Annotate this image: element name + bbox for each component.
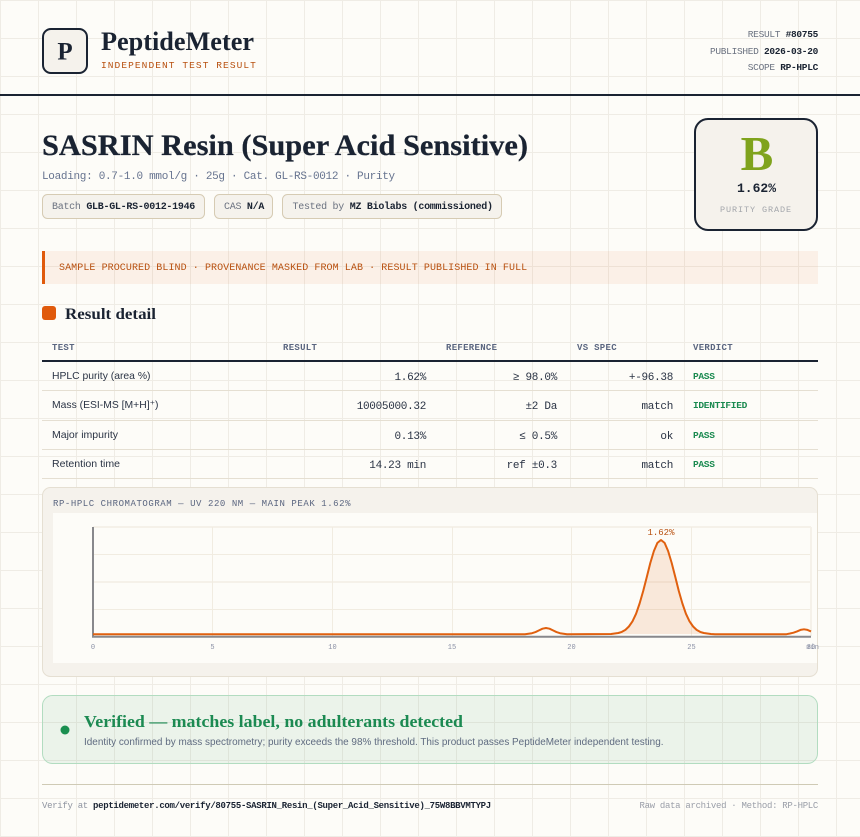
row: retention time: Retention time: [52, 458, 120, 470]
product title: SASRIN Resin (Super Acid Sensitive): [42, 129, 528, 162]
result metadata: PUBLISHED 2026-03-20: [710, 46, 819, 57]
axes: [93, 527, 811, 637]
table header: TEST: [52, 343, 75, 353]
row: major impurity: PASS: [693, 430, 715, 441]
row: hplc purity: PASS: [693, 371, 715, 382]
pill: tested by: [282, 194, 502, 218]
row: mass: Mass (ESI-MS [M+H]⁺): [52, 399, 158, 411]
table header: REFERENCE: [446, 343, 498, 353]
x axis labels: 20: [567, 644, 576, 652]
product subtitle: Loading: 0.7-1.0 mmol/g · 25g · Cat. GL-RS-0012 · Purity: [42, 171, 396, 183]
grade purity value: 1.62%: [737, 181, 776, 196]
row: mass: match: [641, 401, 673, 413]
row: hplc purity: HPLC purity (area %): [52, 370, 150, 382]
results table: [42, 343, 818, 479]
table header: RESULT: [283, 343, 318, 353]
grade letter: B: [741, 126, 773, 181]
chromatogram trace: [93, 540, 811, 634]
table header: [52, 343, 733, 353]
notice banner: [42, 251, 818, 284]
row: retention time: match: [641, 460, 673, 472]
row: retention time: PASS: [693, 459, 715, 470]
verified callout: [42, 696, 818, 764]
x axis labels: min: [806, 644, 819, 652]
callout heading: Verified — matches label, no adulterants detected: [84, 712, 464, 731]
row: retention time: [52, 458, 715, 472]
x axis labels: [91, 644, 819, 652]
notice banner: SAMPLE PROCURED BLIND · PROVENANCE MASKED FROM LAB · RESULT PUBLISHED IN FULL: [59, 263, 527, 274]
icon: status dot: [60, 726, 70, 734]
row: major impurity: [52, 429, 715, 443]
row: mass: 10005000.32: [357, 401, 426, 413]
section heading: result detail: Result detail: [65, 306, 157, 323]
row: major impurity: 0.13%: [394, 431, 427, 443]
row: major impurity: ≤ 0.5%: [519, 431, 558, 443]
pill: batch: [42, 194, 204, 218]
x axis labels: 15: [448, 644, 456, 652]
row: mass: ±2 Da: [525, 401, 558, 413]
pill: tested by: Tested by MZ Biolabs (commissioned): [292, 201, 493, 213]
result metadata: RESULT #80755: [748, 29, 819, 40]
row: retention time: 14.23 min: [369, 460, 426, 472]
row: major impurity: ok: [660, 431, 674, 443]
row: mass: [52, 399, 748, 413]
pill: cas: [214, 194, 272, 218]
peak label: 1.62%: [647, 528, 675, 538]
row: retention time: ref ±0.3: [507, 460, 557, 472]
footer: archive note: Raw data archived · Method: RP-HPLC: [639, 801, 819, 811]
x axis labels: 30: [807, 644, 815, 652]
row: hplc purity: ≥ 98.0%: [513, 372, 558, 384]
row: hplc purity: +-96.38: [629, 372, 673, 384]
line chart: [91, 526, 819, 652]
callout body: Identity confirmed by mass spectrometry; purity exceeds the 98% threshold. This product passes PeptideMeter independent testing.: [84, 737, 664, 748]
row: hplc purity: [52, 370, 715, 384]
chart title: RP-HPLC CHROMATOGRAM — UV 220 NM — MAIN PEAK 1.62%: [53, 499, 351, 509]
header: [43, 27, 819, 73]
icon: logo mark: P: [57, 38, 73, 66]
chromatogram panel: [42, 488, 819, 676]
brand tagline: INDEPENDENT TEST RESULT: [101, 60, 257, 71]
pill: batch: Batch GLB-GL-RS-0012-1946: [52, 201, 195, 213]
x axis labels: 5: [210, 644, 215, 652]
footer: verify link: Verify at peptidemeter.com/verify/80755-SASRIN_Resin_(Super_Acid_Sensitive)_75W8BBVMTYPJ: [42, 801, 491, 811]
row: mass: IDENTIFIED: [693, 400, 748, 411]
x axis labels: 25: [687, 644, 696, 652]
peak area fill: [611, 540, 711, 634]
grade caption: PURITY GRADE: [720, 205, 792, 215]
x axis labels: 10: [328, 644, 337, 652]
pill: cas: CAS N/A: [224, 201, 264, 213]
x axis labels: 0: [91, 644, 95, 652]
icon: logo mark: [43, 29, 87, 73]
row: hplc purity: 1.62%: [394, 372, 427, 384]
result metadata: SCOPE RP-HPLC: [748, 62, 819, 73]
grade card: [695, 119, 817, 230]
result metadata: [710, 29, 819, 73]
table header: VS SPEC: [577, 343, 617, 353]
table header: VERDICT: [693, 343, 733, 353]
row: major impurity: Major impurity: [52, 429, 119, 441]
brand name: PeptideMeter: [101, 27, 254, 56]
